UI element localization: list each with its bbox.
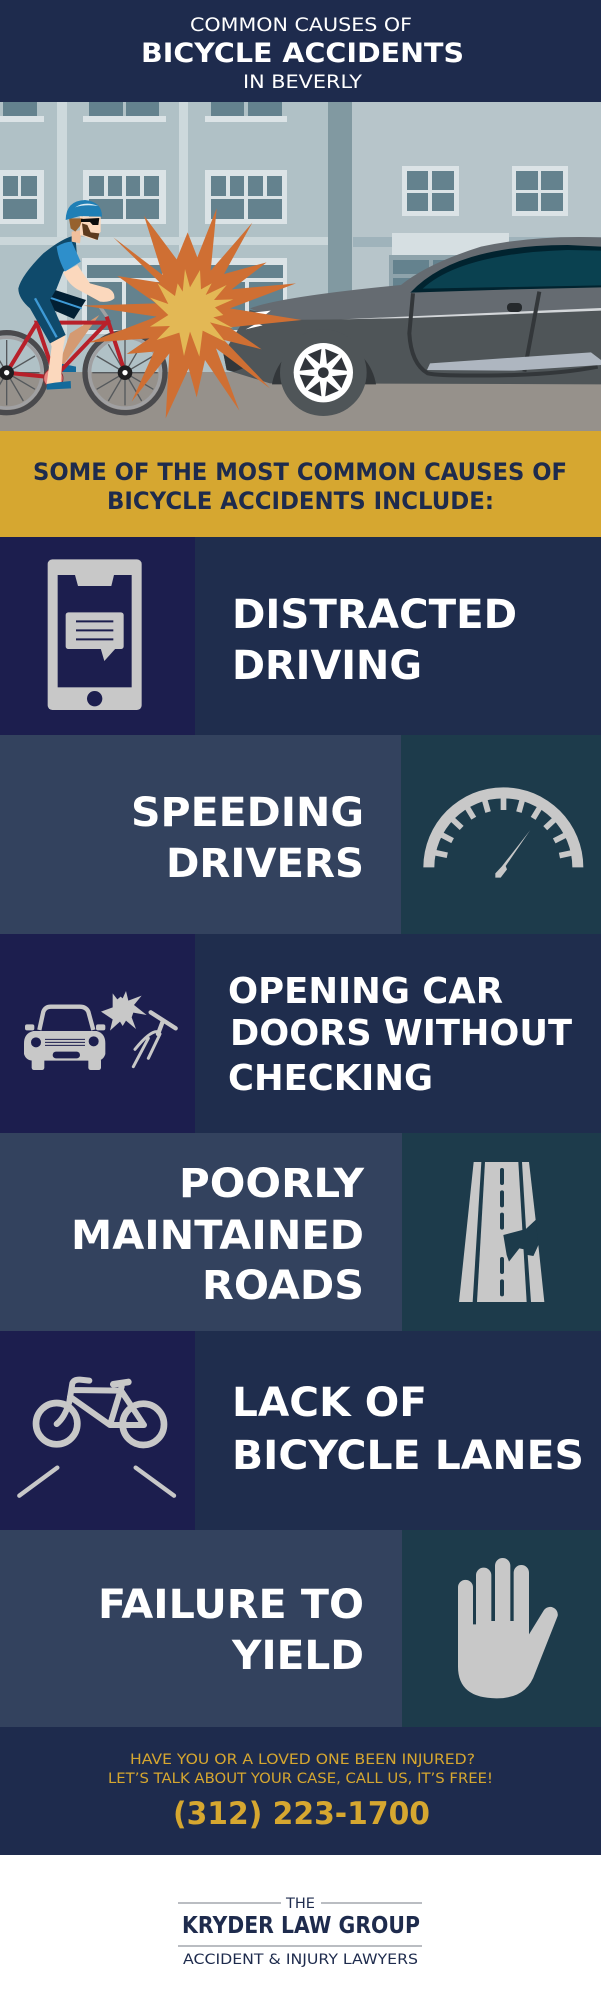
heading: [98, 1582, 364, 1679]
icon: raised hand: [458, 1558, 558, 1698]
heading: [71, 1161, 365, 1309]
icon: bicycle and lane lines: [19, 1380, 174, 1496]
panel: opening car doors: [0, 934, 601, 1133]
title line 1: COMMON CAUSES OF: [190, 15, 412, 36]
heading: MAINTAINED: [71, 1213, 364, 1259]
heading: DRIVERS: [166, 841, 364, 887]
heading: LACK OF: [232, 1380, 427, 1426]
logo: The Kryder Law Group: KRYDER LAW GROUP: [182, 1913, 420, 1939]
heading: FAILURE TO: [98, 1582, 364, 1628]
gold banner: BICYCLE ACCIDENTS INCLUDE:: [107, 487, 494, 515]
panel: speeding drivers: [0, 735, 601, 934]
logo: The Kryder Law Group: THE: [285, 1896, 315, 1912]
heading: DRIVING: [232, 643, 422, 689]
heading: SPEEDING: [131, 790, 364, 836]
logo: The Kryder Law Group: [0, 1855, 601, 2016]
panel: lack of bicycle lanes: [0, 1331, 601, 1530]
title line 2: BICYCLE ACCIDENTS: [141, 38, 464, 69]
car: [223, 237, 601, 416]
heading: DISTRACTED: [232, 592, 517, 638]
call to action footer: [0, 1727, 601, 1855]
icon: car, burst and bicycle fork: [24, 991, 176, 1070]
explosion burst: [83, 208, 302, 418]
heading: ROADS: [202, 1263, 364, 1309]
panel: poorly maintained roads: [0, 1133, 601, 1331]
heading: [228, 971, 572, 1099]
road: [0, 372, 601, 431]
icon: smartphone with message: [48, 559, 142, 710]
heading: CHECKING: [228, 1058, 433, 1099]
gold banner: [0, 431, 601, 537]
call to action footer: HAVE YOU OR A LOVED ONE BEEN INJURED?: [130, 1751, 475, 1768]
heading: YIELD: [231, 1633, 364, 1679]
heading: OPENING CAR: [228, 971, 503, 1012]
gold banner: SOME OF THE MOST COMMON CAUSES OF: [33, 458, 567, 486]
call to action footer: LET’S TALK ABOUT YOUR CASE, CALL US, IT’S FREE!: [108, 1770, 493, 1787]
cyclist on red bicycle: [0, 200, 165, 413]
illustration: cyclist hit by car in front of building: [0, 102, 601, 432]
phone number: (312) 223-1700: [173, 1796, 430, 1832]
heading: POORLY: [179, 1161, 365, 1207]
title line 3: IN BEVERLY: [243, 72, 363, 93]
heading: [232, 592, 517, 689]
heading: [131, 790, 364, 887]
heading: BICYCLE LANES: [232, 1433, 584, 1479]
heading: DOORS WITHOUT: [230, 1013, 572, 1054]
icon: damaged road: [459, 1162, 544, 1302]
panel: failure to yield: [0, 1530, 601, 1727]
header band: [0, 0, 601, 102]
icon: speedometer: [423, 787, 583, 878]
logo: The Kryder Law Group: ACCIDENT & INJURY LAWYERS: [183, 1952, 418, 1968]
panel: distracted driving: [0, 537, 601, 735]
heading: [232, 1380, 584, 1479]
